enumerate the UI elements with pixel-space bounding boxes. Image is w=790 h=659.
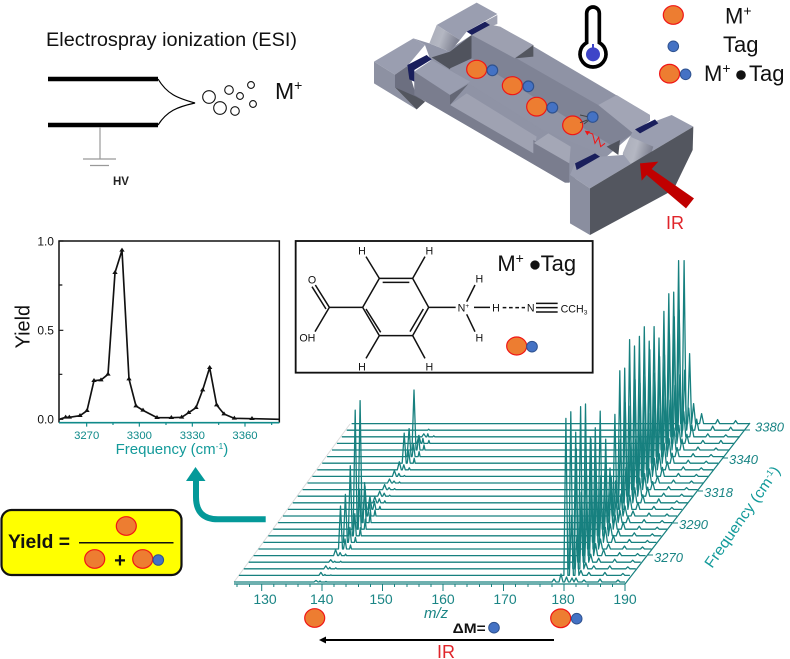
chart: yield vs frequency: -1 — [216, 441, 223, 451]
chart: yield vs frequency: 1.0 — [37, 234, 54, 248]
axis title: m/z: m/z — [424, 605, 449, 622]
panel: molecular structure: OH — [299, 332, 315, 344]
chart: yield vs frequency: 3360 — [232, 430, 258, 442]
diagram: ESI capillary: HV — [113, 176, 129, 188]
chart: yield vs frequency: Frequency (cm — [116, 441, 216, 458]
axis labels: m/z ticks: 140 — [310, 591, 334, 607]
callout: yield formula: + — [114, 550, 126, 572]
chart: yield vs frequency: 3270 — [74, 430, 99, 442]
panel: molecular structure: + — [465, 303, 469, 310]
panel: molecular structure: H — [492, 303, 500, 315]
axis title: frequency: Frequency (cm — [701, 480, 773, 571]
axis labels: m/z ticks: 170 — [493, 591, 517, 607]
callout: yield formula: Yield = — [8, 532, 70, 553]
icon: M+ Tag below axis — [551, 609, 582, 628]
panel: molecular structure: 3 — [584, 309, 588, 316]
panel: molecular structure: H — [475, 274, 483, 286]
legend: species: Tag — [749, 61, 784, 86]
axis labels: frequency ticks — [654, 420, 785, 565]
icon: thermometer — [580, 7, 606, 67]
legend: species: + — [743, 2, 752, 18]
legend: species: + — [722, 60, 731, 76]
callout: yield formula — [2, 510, 182, 575]
chart: yield vs frequency: 3330 — [180, 430, 205, 442]
title: electrospray ionization: Electrospray ionization (ESI) — [46, 29, 297, 51]
axis labels: frequency ticks: 3318 — [704, 485, 734, 500]
panel: molecular structure: H — [475, 332, 483, 344]
panel: molecular structure: CCH — [561, 303, 584, 315]
arrow: mass loss direction — [319, 636, 554, 644]
label: M+ from ESI: + — [294, 77, 302, 93]
axis title: frequency: ) — [767, 463, 784, 477]
axis labels: frequency ticks: 3290 — [679, 517, 709, 532]
panel: molecular structure: H — [358, 361, 366, 373]
axis labels: frequency ticks: 3380 — [755, 420, 785, 435]
panel: molecular structure: O — [308, 274, 316, 286]
diagram: ion trap — [374, 3, 693, 235]
legend: species: M — [704, 61, 722, 86]
panel: molecular structure: M — [497, 251, 516, 276]
panel: molecular structure — [296, 241, 593, 373]
axis title: frequency: -1 — [762, 468, 775, 480]
legend: species — [660, 2, 784, 86]
diagram: ESI capillary — [48, 79, 256, 188]
label: IR at trap: IR — [666, 213, 684, 233]
chart: 3D waterfall spectra — [234, 261, 750, 591]
axis labels: m/z ticks — [253, 591, 637, 607]
axis labels: m/z ticks: 150 — [369, 591, 393, 607]
panel: molecular structure: Tag — [541, 251, 576, 276]
panel: molecular structure: N — [527, 303, 535, 315]
panel: molecular structure: H — [358, 245, 366, 257]
axis labels: m/z ticks: 130 — [253, 591, 277, 607]
arrow: IR beam — [640, 162, 694, 208]
axis labels: frequency ticks: 3340 — [729, 452, 759, 467]
axis labels: m/z ticks: 190 — [613, 591, 637, 607]
label: delta M equals tag: ΔM= — [453, 620, 486, 636]
axis labels: m/z ticks: 160 — [431, 591, 455, 607]
chart: yield vs frequency: Yield — [12, 305, 34, 348]
legend: species: Tag — [723, 32, 758, 57]
chart: yield vs frequency: 0.0 — [37, 412, 54, 426]
icon: M+ below axis — [305, 609, 325, 627]
panel: molecular structure: H — [425, 361, 433, 373]
panel: molecular structure: + — [516, 250, 524, 266]
panel: molecular structure: H — [425, 245, 433, 257]
chart: yield vs frequency — [12, 234, 279, 458]
arrow: spectra to yield chart — [186, 467, 266, 519]
legend: species: M — [725, 4, 743, 28]
axis labels: m/z ticks: 180 — [551, 591, 575, 607]
label: delta M equals tag — [453, 620, 499, 636]
chart: yield vs frequency: 3300 — [127, 430, 152, 442]
chart: yield vs frequency: 0.5 — [37, 324, 54, 338]
panel: molecular structure: N — [458, 303, 465, 315]
axis labels: frequency ticks: 3270 — [654, 550, 684, 565]
label: M+ from ESI: M — [275, 78, 294, 104]
chart: yield vs frequency: ) — [223, 441, 228, 458]
